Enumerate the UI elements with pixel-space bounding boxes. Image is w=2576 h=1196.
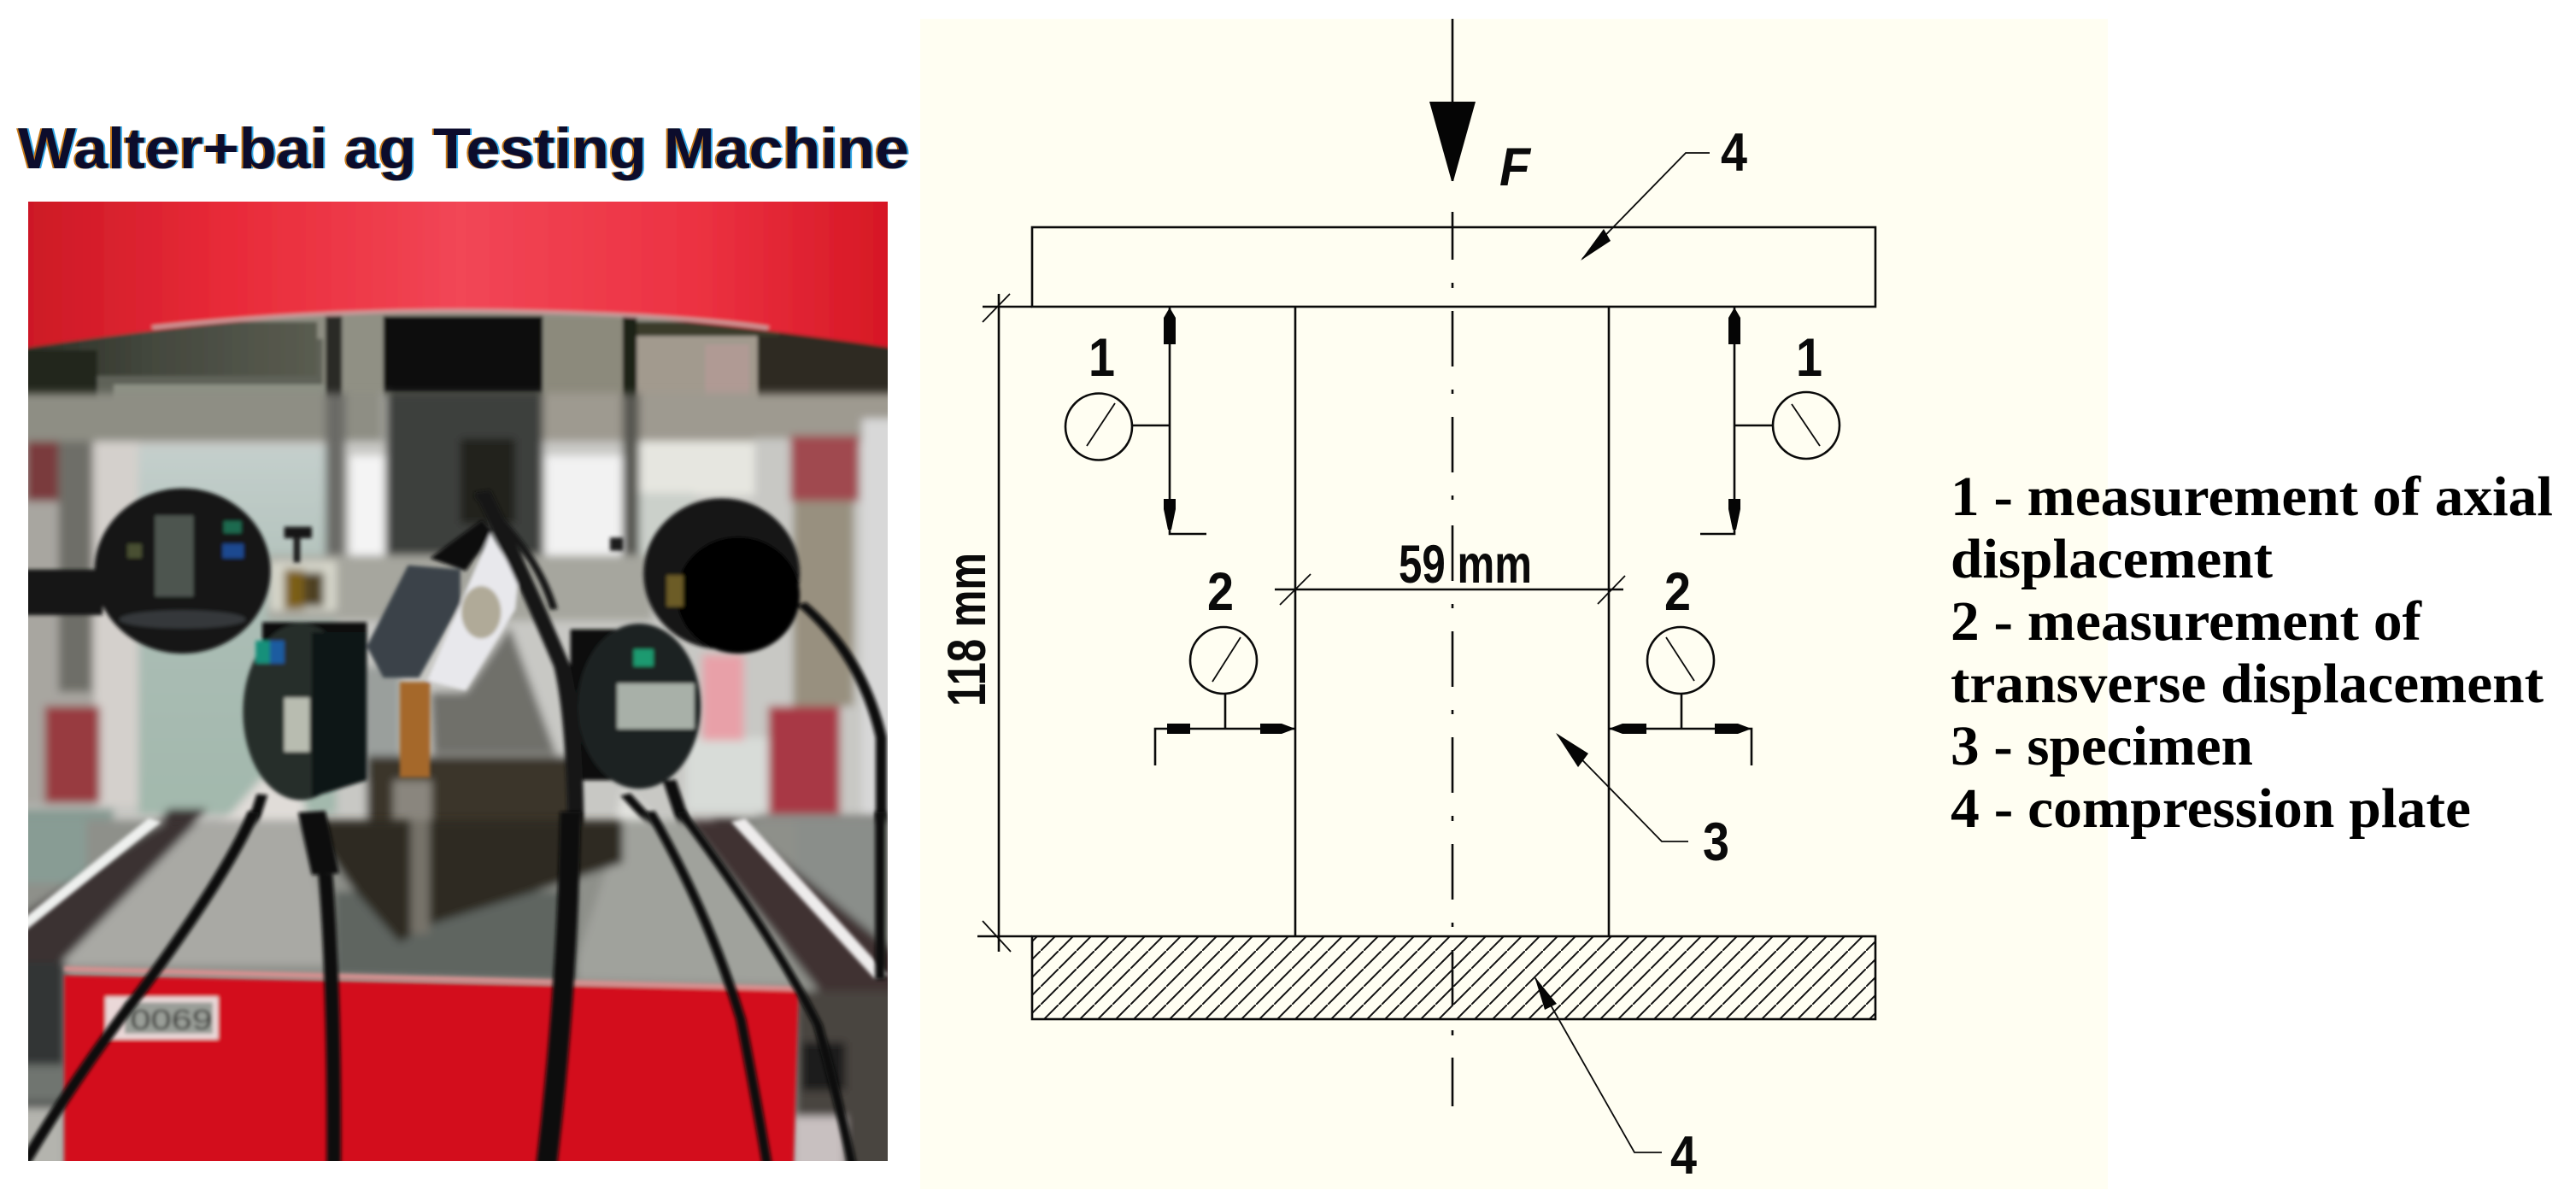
legend text block: displacement xyxy=(1951,528,2273,590)
label: 3: 3 xyxy=(1703,812,1729,872)
leader arrow to upper plate xyxy=(1581,153,1710,261)
leader arrow to lower plate xyxy=(1534,976,1662,1152)
photo: lower red base and table xyxy=(28,808,888,1161)
gauge 2 right xyxy=(1609,627,1752,765)
panel: photo of testing machine xyxy=(28,202,888,1161)
gauge 1 left xyxy=(1065,307,1206,534)
label plate on machine base xyxy=(105,997,218,1040)
gauge: upper right xyxy=(643,498,800,654)
center line with load arrow F xyxy=(1429,19,1476,1106)
label: 1 left: 1 xyxy=(1088,328,1115,388)
label: 2 right: 2 xyxy=(1664,562,1691,622)
label: 4 bottom: 4 xyxy=(1670,1126,1697,1186)
lower compression plate hatched xyxy=(1032,936,1875,1019)
label: 2 left: 2 xyxy=(1207,562,1234,622)
legend text block: 1 - measurement of axial xyxy=(1951,466,2553,528)
photo: upper red crosshead and steel band xyxy=(28,202,888,400)
label: F: F xyxy=(1499,138,1531,197)
legend text block: 2 - measurement of xyxy=(1951,590,2422,653)
gauge: lower right xyxy=(571,624,701,789)
specimen xyxy=(1295,307,1609,936)
legend text block xyxy=(1951,466,2553,840)
panel: schematic drawing background xyxy=(920,19,2108,1189)
label: 59 mm: 59 mm xyxy=(1399,535,1532,595)
gauge: lower left xyxy=(243,622,367,800)
title: Walter+bai ag Testing Machine xyxy=(18,116,909,181)
gauge: upper left xyxy=(95,489,271,654)
label: 1 right: 1 xyxy=(1796,328,1822,388)
gauge: center tilted xyxy=(367,519,518,690)
label: 4 top: 4 xyxy=(1721,123,1747,183)
118 mm dimension line xyxy=(977,294,1032,952)
gauge 2 left xyxy=(1155,627,1295,765)
legend text block: 4 - compression plate xyxy=(1951,777,2471,840)
legend text block: 3 - specimen xyxy=(1951,715,2253,777)
schematic: test setup drawing xyxy=(977,19,1875,1152)
legend text block: transverse displacement xyxy=(1951,653,2544,715)
gauge 1 right xyxy=(1700,307,1840,534)
cables xyxy=(21,812,880,1173)
photo: middle section with gauges xyxy=(28,387,888,827)
59 mm dimension line xyxy=(1275,574,1625,605)
upper compression plate xyxy=(1032,227,1875,307)
label: 118 mm: 118 mm xyxy=(937,553,997,706)
label plate on machine base: 0069 xyxy=(130,1004,213,1035)
leader arrow to specimen xyxy=(1556,733,1688,841)
